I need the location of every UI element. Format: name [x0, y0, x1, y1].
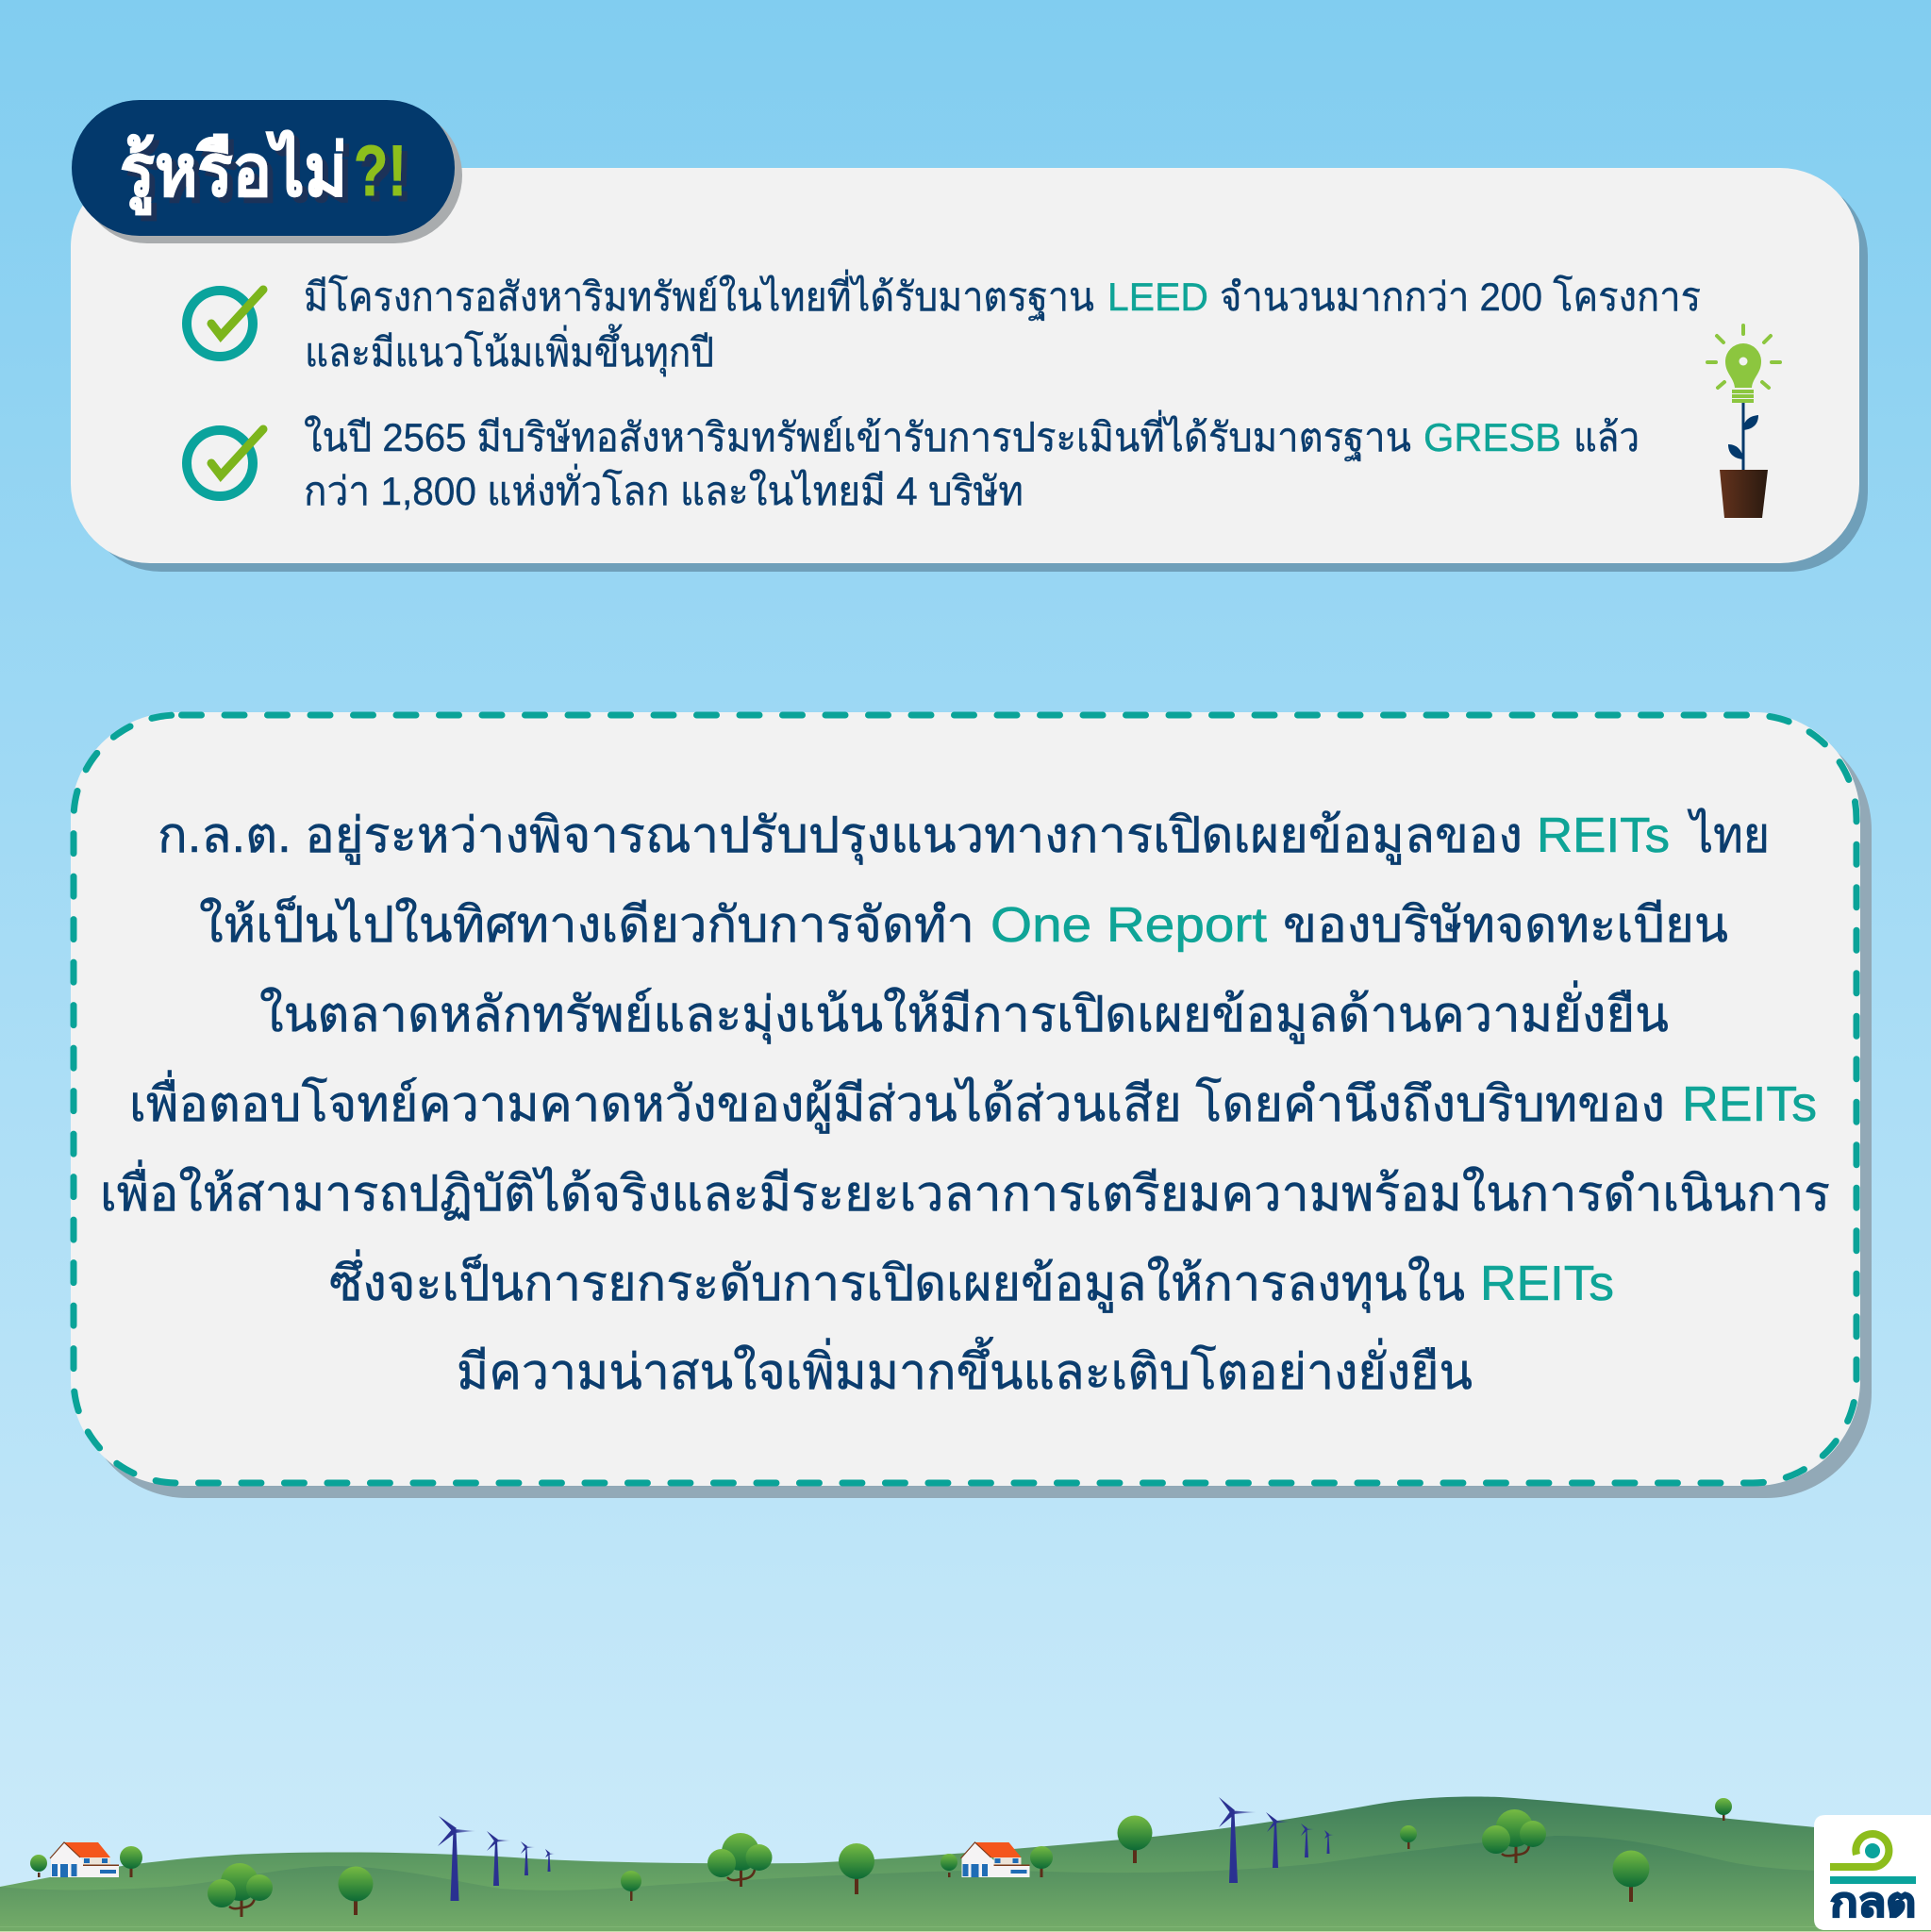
- tree: [1715, 1798, 1732, 1821]
- heading text: ?!: [354, 131, 407, 211]
- heading text: รู้หรือไม่: [120, 129, 347, 215]
- wind turbine: [521, 1841, 535, 1875]
- tree cluster: [1482, 1809, 1546, 1863]
- fact 2 text: ในปี 2565 มีบริษัทอสังหาริมทรัพย์เข้ารับการประเมินที่ได้รับมาตรฐาน: [304, 410, 1411, 461]
- statement text: REITs: [1480, 1257, 1614, 1311]
- tree: [621, 1871, 641, 1901]
- tree: [1613, 1851, 1649, 1902]
- panel: main statement: [71, 712, 1872, 1498]
- statement text: REITs: [1537, 808, 1670, 863]
- tree: [30, 1855, 47, 1877]
- statement text: ให้เป็นไปในทิศทางเดียวกับการจัดทำ: [199, 896, 974, 953]
- wind turbine: [1219, 1797, 1257, 1883]
- tree: [1400, 1825, 1417, 1849]
- wind turbine: [487, 1831, 510, 1886]
- wind turbine: [545, 1849, 555, 1872]
- heading pill: [72, 100, 462, 243]
- statement text: ไทย: [1687, 808, 1770, 863]
- statement text: ของบริษัทจดทะเบียน: [1283, 898, 1728, 953]
- statement text: [100, 808, 1830, 1400]
- fact 2 text: กว่า 1,800 แห่งทั่วโลก และในไทยมี 4 บริษัท: [304, 464, 1024, 513]
- fact 2 text: [304, 410, 1640, 513]
- wind turbine: [1324, 1830, 1334, 1854]
- fact 1 text: มีโครงการอสังหาริมทรัพย์ในไทยที่ได้รับมาตรฐาน: [304, 270, 1094, 321]
- tree: [338, 1866, 374, 1915]
- icon: light bulb plant: [1707, 325, 1780, 518]
- fact 2 text: แล้ว: [1573, 415, 1640, 459]
- house: [50, 1842, 119, 1877]
- statement text: REITs: [1682, 1077, 1817, 1132]
- fact 1 text: จำนวนมากกว่า 200 โครงการ: [1220, 274, 1701, 319]
- tree: [120, 1846, 142, 1877]
- panel: did you know: [71, 100, 1868, 572]
- tree cluster: [208, 1863, 273, 1917]
- statement text: เพื่อตอบโจทย์ความคาดหวังของผู้มีส่วนได้ส่วนเสีย โดยคำนึงถึงบริบทของ: [129, 1070, 1665, 1134]
- statement text: ซึ่งจะเป็นการยกระดับการเปิดเผยข้อมูลให้การลงทุนใน: [329, 1249, 1465, 1313]
- wind turbine: [438, 1816, 475, 1901]
- statement text: เพื่อให้สามารถปฏิบัติได้จริงและมีระยะเวลาการเตรียมความพร้อมในการดำเนินการ: [100, 1159, 1830, 1222]
- fact 1 text: LEED: [1107, 275, 1208, 319]
- logo: SEC: [1814, 1815, 1931, 1930]
- wind turbine: [1301, 1824, 1314, 1857]
- logo wordmark: กลต: [1830, 1880, 1916, 1924]
- tree cluster: [707, 1833, 772, 1887]
- icon: check 2: [187, 429, 263, 496]
- tree: [941, 1854, 957, 1877]
- statement text: ก.ล.ต. อยู่ระหว่างพิจารณาปรับปรุงแนวทางการเปิดเผยข้อมูลของ: [158, 808, 1523, 865]
- fact 1 text: [304, 270, 1701, 377]
- fact 2 text: GRESB: [1423, 415, 1561, 459]
- house: [960, 1842, 1030, 1877]
- landscape: hills: [0, 1797, 1931, 1932]
- statement text: ในตลาดหลักทรัพย์และมุ่งเน้นให้มีการเปิดเผยข้อมูลด้านความยั่งยืน: [259, 980, 1669, 1044]
- tree: [1030, 1846, 1053, 1877]
- icon: check 1: [187, 290, 263, 357]
- wind turbine: [1266, 1812, 1290, 1868]
- tree: [1117, 1815, 1153, 1863]
- statement text: มีความน่าสนใจเพิ่มมากขึ้นและเติบโตอย่างยั่งยืน: [457, 1337, 1473, 1400]
- statement text: One Report: [990, 898, 1268, 953]
- fact 1 text: และมีแนวโน้มเพิ่มขึ้นทุกปี: [305, 324, 714, 377]
- tree: [839, 1843, 874, 1894]
